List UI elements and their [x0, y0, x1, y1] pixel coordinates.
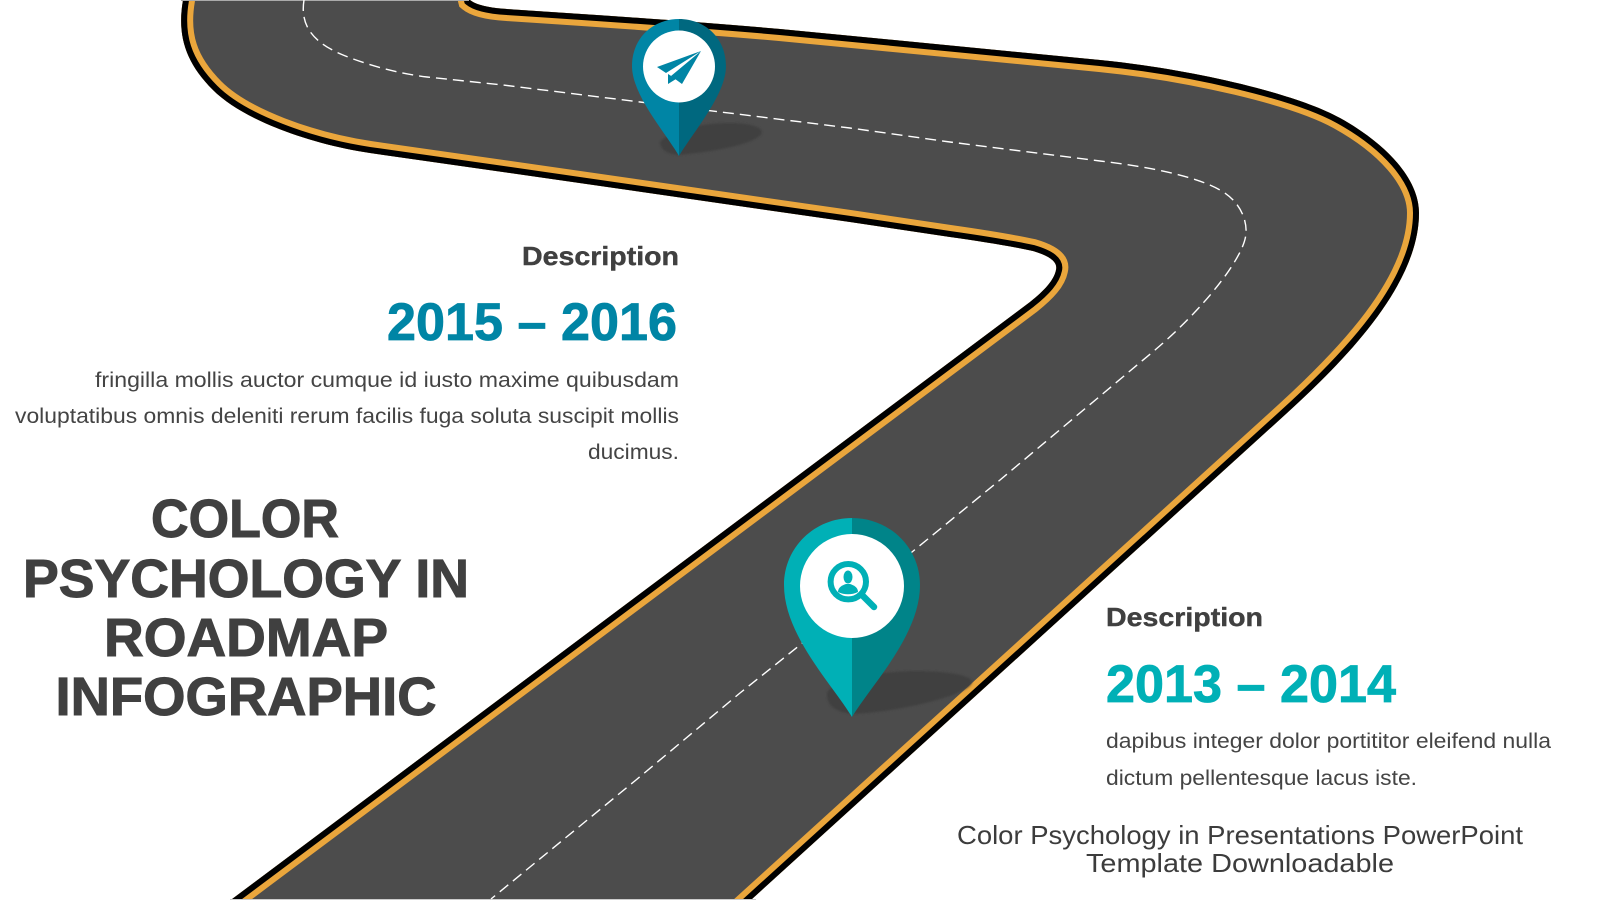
body text: voluptatibus omnis deleniti rerum facilis fuga soluta suscipit mollis [15, 405, 679, 428]
title: INFOGRAPHIC [56, 667, 436, 727]
date range: 2013 – 2014 [1106, 655, 1397, 714]
icon: magnifier with person [831, 564, 874, 607]
body text: ducimus. [588, 441, 679, 464]
body text: fringilla mollis auctor cumque id iusto maxime quibusdam [95, 369, 679, 392]
body text [1106, 730, 1551, 790]
road [181, 0, 1419, 900]
road centre dashed line [303, 0, 1246, 899]
body text [15, 369, 679, 464]
footer caption: Template Downloadable [1086, 848, 1394, 878]
heading: Description [522, 241, 679, 271]
icon: paper plane [657, 51, 701, 84]
pin body [632, 19, 726, 156]
body text: dictum pellentesque lacus iste. [1106, 767, 1417, 790]
title: COLOR [151, 489, 339, 549]
pin shadow [827, 671, 972, 714]
title [23, 489, 469, 727]
description block: 2015-2016 [15, 241, 679, 464]
pin: 2013-2014 [784, 518, 972, 717]
description block: 2013-2014 [1106, 602, 1551, 790]
footer caption: Color Psychology in Presentations PowerPoint [957, 820, 1524, 850]
pin shadow [660, 123, 762, 155]
pin: 2015-2016 [632, 19, 762, 156]
heading: Description [1106, 602, 1263, 632]
footer caption [957, 820, 1524, 878]
pin body [784, 518, 920, 717]
title: ROADMAP [104, 608, 388, 668]
body text: dapibus integer dolor portititor eleifend nulla [1106, 730, 1551, 753]
title: PSYCHOLOGY IN [23, 549, 469, 609]
date range: 2015 – 2016 [387, 293, 677, 352]
